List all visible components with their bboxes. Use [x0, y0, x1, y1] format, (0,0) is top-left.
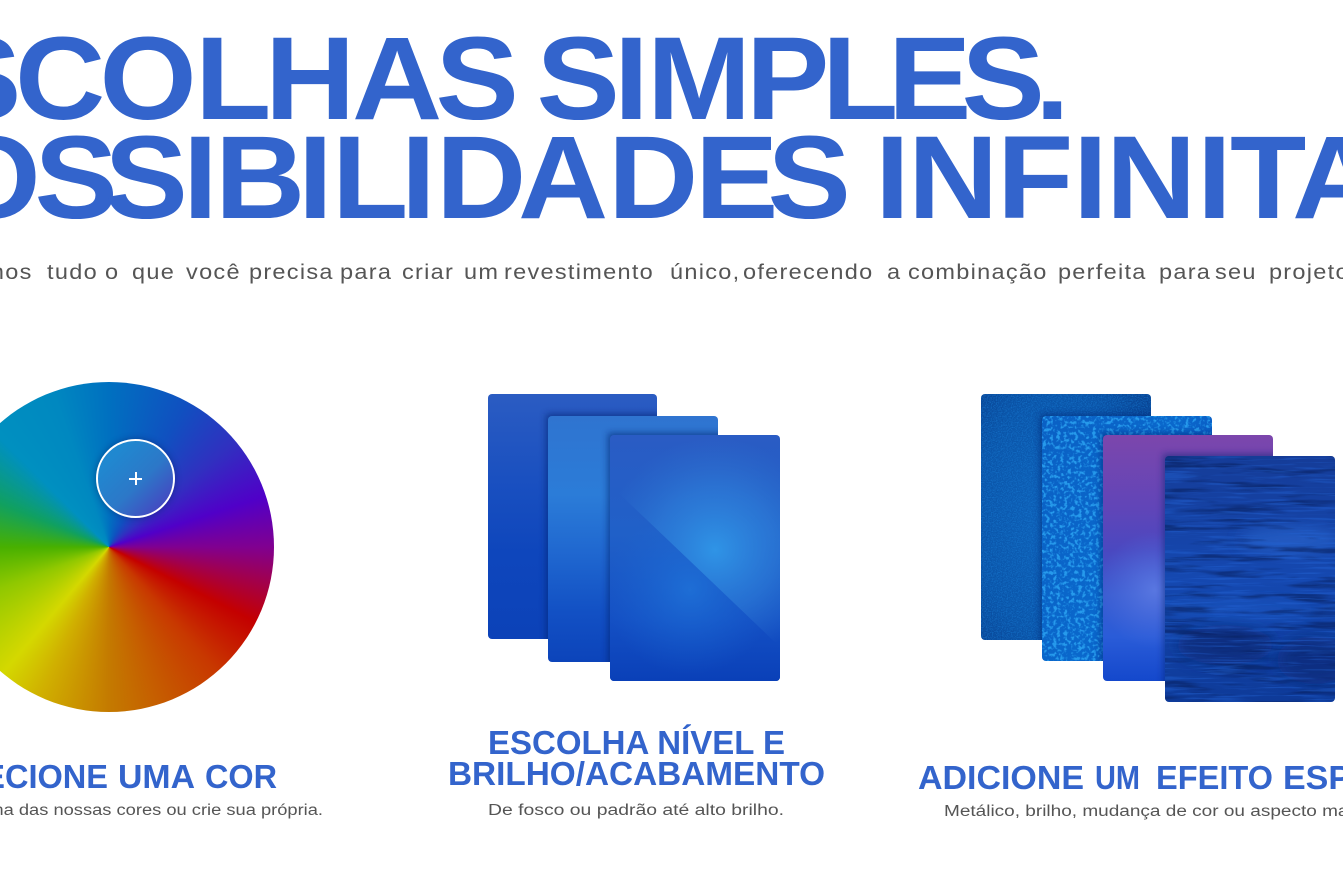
heading: select a color: COR	[205, 759, 277, 796]
subtitle: revestimento	[504, 260, 654, 284]
subtitle: único,	[670, 260, 740, 284]
subtitle: precisa	[249, 260, 334, 284]
panel: color shift	[1103, 435, 1273, 681]
panel: wood texture	[1165, 456, 1343, 702]
heading: special effect: ADICIONE	[918, 760, 1084, 797]
title	[0, 12, 1343, 230]
subtitle: a	[887, 260, 901, 284]
subtitle: que	[132, 260, 175, 284]
panel: high gloss	[610, 435, 780, 681]
heading: special effect	[918, 760, 1343, 797]
panel: matte	[488, 394, 657, 639]
subtitle: perfeita	[1058, 260, 1147, 284]
column 3 text	[918, 760, 1343, 820]
heading: gloss level: BRILHO/ACABAMENTO	[448, 756, 825, 793]
caption: special effect: Metálico, brilho, mudança de cor ou aspecto madeira.	[944, 803, 1343, 820]
caption: gloss level: De fosco ou padrão até alto brilho.	[488, 802, 784, 819]
heading: special effect: EFEITO	[1156, 760, 1273, 797]
heading: special effect: UM	[1095, 760, 1140, 797]
heading: gloss level	[448, 724, 825, 793]
color picker ring	[96, 439, 175, 518]
subtitle: o	[105, 260, 119, 284]
color wheel	[0, 382, 274, 712]
panel stack: special effects	[981, 394, 1335, 702]
subtitle: criar	[402, 260, 454, 284]
subtitle: você	[186, 260, 241, 284]
panel: metallic	[981, 394, 1151, 640]
panel: standard	[548, 416, 718, 662]
subtitle: um	[464, 260, 499, 284]
plus icon	[129, 472, 142, 485]
subtitle: seu	[1215, 260, 1257, 284]
heading: select a color: UMA	[118, 759, 195, 796]
heading: gloss level: ESCOLHA NÍVEL E	[488, 724, 785, 762]
subtitle: oferecendo	[743, 260, 874, 284]
subtitle	[0, 260, 1343, 284]
heading: select a color	[0, 759, 277, 796]
subtitle: tudo	[47, 260, 98, 284]
subtitle: para	[340, 260, 392, 284]
column 1 text	[0, 759, 323, 819]
panel stack: gloss levels	[488, 394, 780, 681]
column 2 text	[448, 724, 825, 819]
subtitle: combinação	[908, 260, 1048, 284]
panel: sparkle	[1042, 416, 1212, 661]
subtitle: para	[1159, 260, 1211, 284]
